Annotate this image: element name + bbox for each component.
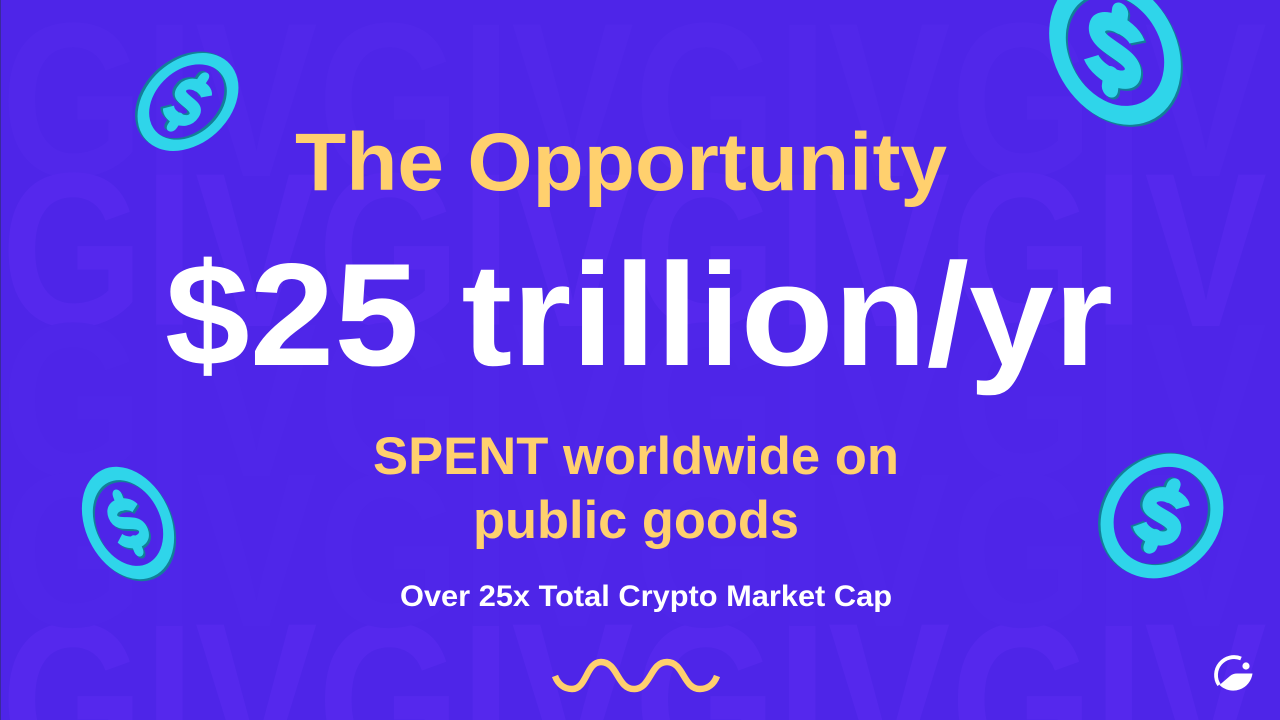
title: The Opportunity	[295, 117, 947, 208]
wave ornament	[555, 662, 717, 689]
subheading: SPENT worldwide on	[373, 427, 899, 486]
icon: coin bottom right	[1082, 437, 1240, 594]
icon: Giveth logo	[1216, 657, 1252, 691]
icon: coin top left	[124, 40, 250, 163]
icon: coin bottom left	[72, 460, 186, 588]
headline figure: $25 trillion/yr	[165, 233, 1113, 396]
supporting note: Over 25x Total Crypto Market Cap	[400, 580, 892, 613]
icon: coin top right	[1034, 0, 1198, 138]
subheading: public goods	[473, 491, 799, 550]
subheading	[373, 427, 899, 550]
